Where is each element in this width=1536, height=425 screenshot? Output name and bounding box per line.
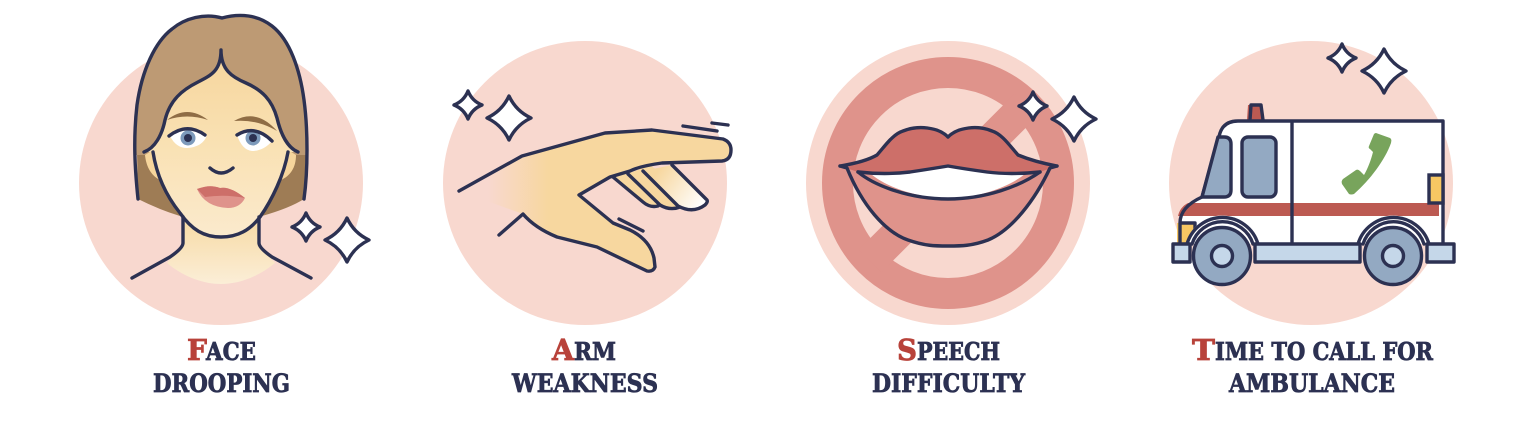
label: arm weakness [511,333,658,398]
illustration: drooping hand [459,123,731,271]
icon: phone [1342,133,1391,194]
background circle: face [79,41,363,325]
illustration: lips [840,128,1057,246]
label: arm weakness: WEAKNESS [511,369,658,398]
label: time to call for ambulance [1192,333,1434,398]
siren light [1247,105,1263,120]
illustration: ambulance [1173,105,1454,284]
background circle: speech [806,41,1090,325]
icon: sparkles [292,213,369,262]
prohibition sign [838,72,1058,294]
label: face drooping: DROOPING [153,369,290,398]
label: time to call for ambulance: IME TO CALL FOR [1215,337,1434,366]
label: speech difficulty: DIFFICULTY [872,369,1026,398]
label: time to call for ambulance: T [1192,333,1215,367]
rear door light [1429,175,1443,203]
label: face drooping: ACE [205,337,256,366]
icon: sparkles [1019,92,1096,141]
label: speech difficulty: PEECH [917,337,1000,366]
background circle: ambulance [1169,41,1453,325]
panel: face drooping [79,15,369,398]
label: face drooping [153,333,290,398]
panel: speech difficulty [806,41,1096,398]
icon: sparkles [454,91,531,140]
label: time to call for ambulance: AMBULANCE [1228,369,1395,398]
label: speech difficulty: S [897,333,917,367]
panel: time to call ambulance [1169,41,1454,398]
label: speech difficulty [872,333,1026,398]
label: arm weakness: A [551,333,574,367]
illustration: woman's face [132,15,311,284]
background circle: arm [443,41,727,325]
panel: arm weakness [443,41,731,398]
label: face drooping: F [187,333,207,367]
wheels and bumper [1173,216,1454,284]
windows [1202,137,1231,197]
icon: sparkles [1328,44,1406,93]
label: arm weakness: RM [574,337,616,366]
